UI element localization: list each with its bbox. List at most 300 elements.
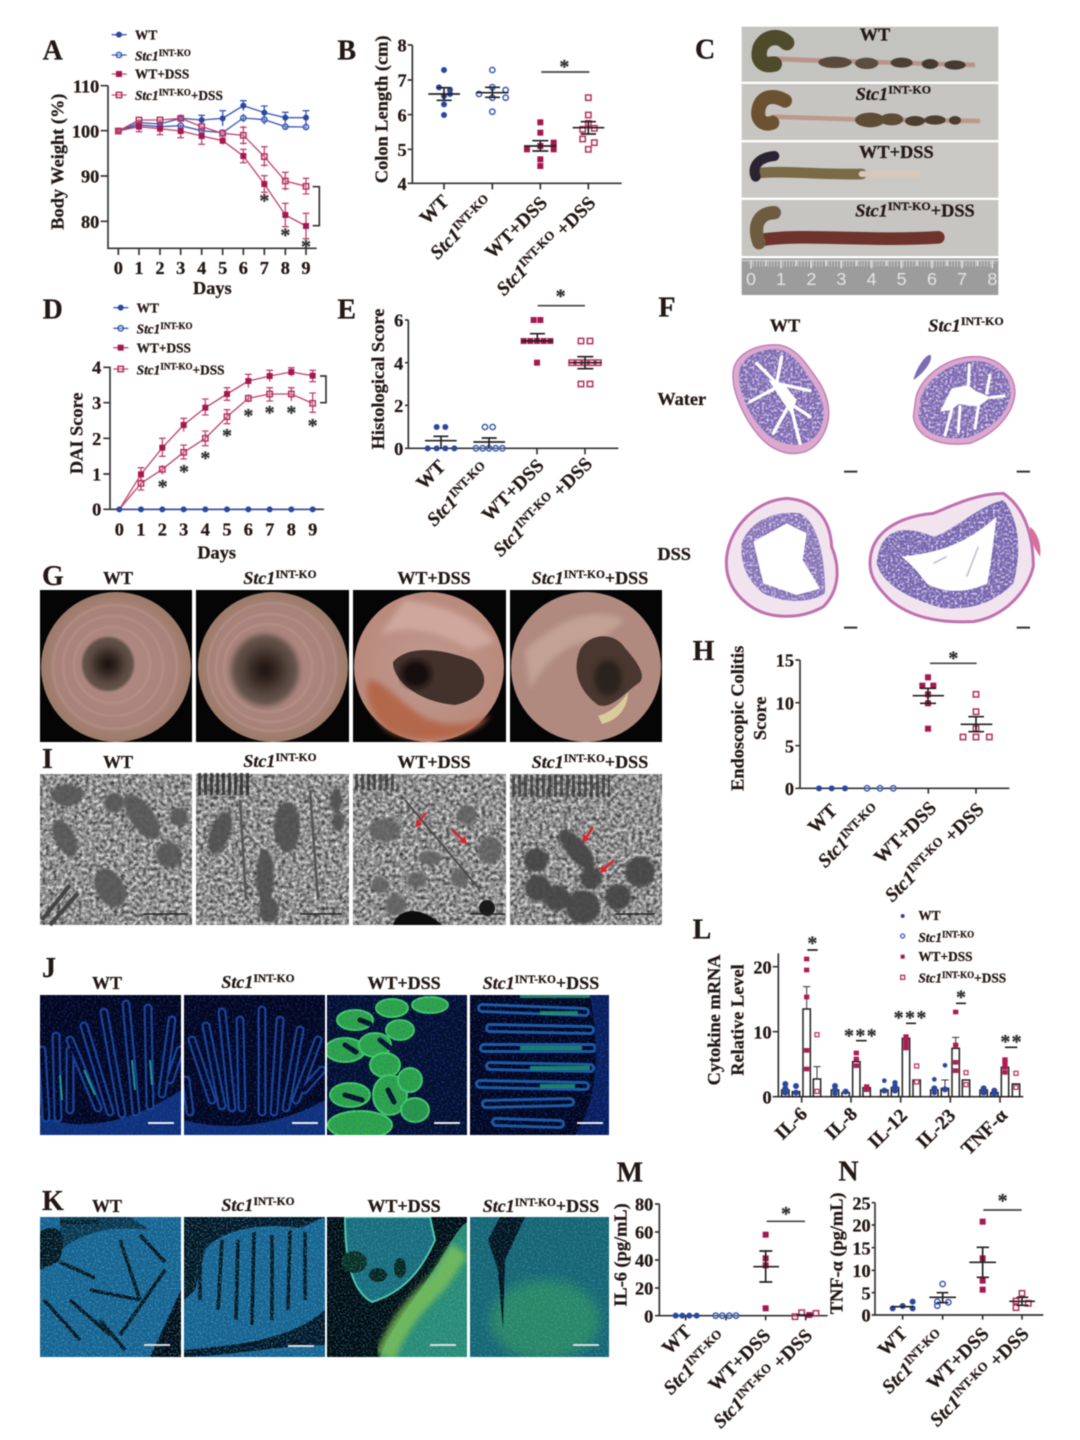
panel J headers: WT+DSS	[367, 973, 441, 993]
legend L: WT	[918, 908, 941, 923]
x labels E: WT	[413, 456, 450, 494]
panel E: histological score scatter	[337, 285, 618, 561]
legend L: Stc1	[918, 971, 942, 986]
y labels H: 15	[776, 651, 794, 671]
panel letter C: C	[695, 34, 715, 65]
y title L: Cytokine mRNA	[704, 954, 724, 1085]
legend D	[113, 300, 225, 377]
y labels D: 3	[92, 393, 101, 413]
electron micrograph Stc1 INT-KO	[196, 774, 349, 925]
x labels B: +DSS	[549, 193, 600, 244]
x labels D: 3	[179, 520, 188, 540]
x labels N: WT	[874, 1323, 912, 1361]
y labels N: 15	[852, 1238, 871, 1258]
y labels M: 60	[635, 1223, 653, 1243]
panel I headers: INT-KO	[275, 752, 317, 764]
y labels B	[397, 36, 407, 194]
x labels M: WT	[658, 1321, 696, 1359]
significance L: *	[956, 987, 966, 1009]
panel letter M: M	[617, 1158, 643, 1189]
y title E: Histological Score	[368, 309, 388, 449]
y labels D	[92, 358, 101, 520]
panel H: endoscopic colitis score scatter	[693, 636, 1009, 906]
panel I headers: WT+DSS	[397, 752, 471, 772]
y labels N: 5	[861, 1283, 871, 1303]
legend D: INT-KO	[160, 362, 193, 372]
panel I headers: WT	[103, 752, 133, 772]
y title L	[704, 954, 747, 1085]
x labels E: Stc1	[489, 522, 529, 561]
x labels L	[771, 1103, 1012, 1160]
y axis labels A: 110	[73, 77, 99, 97]
panel K headers: WT+DSS	[367, 1196, 441, 1216]
legend L: WT+DSS	[918, 949, 973, 964]
x labels E: Stc1	[423, 492, 462, 531]
x labels B	[416, 191, 600, 300]
endoscopy Stc1 INT-KO+DSS	[510, 590, 662, 742]
panel letter I: I	[42, 744, 53, 775]
series Stc1 INT-KO	[116, 114, 309, 135]
axes H	[795, 660, 1009, 794]
immunofluorescence K WT+DSS	[327, 1217, 467, 1357]
y labels N: 25	[852, 1193, 871, 1213]
ruler: 4	[867, 269, 877, 289]
x labels D: 1	[136, 520, 146, 540]
x axis labels A: 5	[218, 258, 227, 278]
significance bracket and stars A	[259, 187, 319, 258]
x labels E: +DSS	[546, 454, 597, 505]
photo row Stc1 INT-KO	[742, 82, 998, 140]
x axis labels A	[114, 258, 311, 278]
ruler: 6	[927, 269, 937, 289]
panel K headers: WT	[92, 1196, 122, 1216]
panel L: cytokine mRNA bar chart	[693, 908, 1023, 1160]
significance bracket and stars D: *	[179, 461, 189, 483]
x labels E	[413, 453, 597, 561]
x labels D	[115, 520, 317, 540]
legend D: +DSS	[192, 362, 225, 377]
y labels D: 1	[92, 465, 101, 485]
significance H: *	[948, 648, 958, 670]
section WT water	[733, 345, 829, 454]
x labels N	[874, 1323, 1034, 1431]
y axis labels A: 100	[72, 121, 99, 141]
legend A: WT	[135, 27, 157, 42]
panel K headers: INT-KO	[253, 1196, 295, 1208]
y title B: Colon Length (cm)	[371, 36, 392, 183]
x axis labels A: 0	[114, 258, 123, 278]
y labels H	[776, 651, 794, 799]
significance H	[930, 648, 977, 670]
data points L	[782, 957, 1018, 1097]
legend A: Stc1	[135, 88, 159, 103]
electron micrograph WT	[40, 774, 192, 925]
significance M	[767, 1203, 805, 1225]
x labels E: INT-KO	[513, 489, 555, 531]
x labels L: TNF-α	[957, 1105, 1012, 1160]
x labels N: INT-KO	[949, 1359, 991, 1401]
x labels H	[804, 798, 989, 906]
photo row Stc1 INT-KO: Stc1	[856, 84, 888, 104]
panel J headers: WT	[92, 973, 122, 993]
x labels L: IL-6	[771, 1103, 812, 1144]
y labels M: 80	[635, 1195, 653, 1215]
y labels H: 5	[785, 736, 794, 756]
photo row WT	[742, 25, 998, 82]
photo row WT+DSS	[742, 142, 998, 198]
series WT and Stc1 INT-KO baseline	[116, 506, 316, 512]
y axis labels A	[72, 77, 99, 232]
axes D	[103, 367, 324, 509]
x axis labels A: 2	[155, 258, 165, 278]
x labels D: 4	[201, 520, 210, 540]
x labels H: INT-KO	[837, 800, 879, 842]
x labels M: +DSS	[766, 1325, 817, 1376]
x labels B: INT-KO	[450, 191, 492, 233]
data points H	[816, 674, 992, 791]
immunofluorescence K Stc1 INT-KO	[184, 1217, 325, 1357]
y title M: IL-6 (pg/mL)	[611, 1203, 632, 1307]
panel I headers: Stc1	[243, 751, 275, 771]
y labels L: 20	[753, 957, 772, 977]
section WT DSS	[726, 498, 837, 616]
endoscopy WT	[40, 590, 192, 742]
y labels E: 4	[394, 353, 403, 373]
x labels M: INT-KO	[733, 1360, 775, 1402]
y labels D: 2	[92, 429, 101, 449]
x labels H: Stc1	[881, 867, 920, 906]
data points E	[425, 317, 602, 451]
y axis title A: Body Weight (%)	[47, 94, 68, 230]
legend D: WT	[137, 300, 159, 315]
panel G headers: WT+DSS	[397, 568, 471, 588]
y labels B: 4	[397, 174, 407, 194]
ruler: 3	[836, 269, 846, 289]
significance N	[983, 1190, 1022, 1212]
y labels H: 10	[776, 693, 794, 713]
ruler: 5	[897, 269, 907, 289]
legend D: INT-KO	[160, 321, 193, 331]
significance L: *	[807, 933, 817, 955]
x labels B: Stc1	[493, 261, 532, 300]
legend A: Stc1	[135, 49, 159, 64]
x labels M: Stc1	[709, 1394, 749, 1433]
x labels L: IL-23	[913, 1105, 960, 1153]
x axis labels A: 7	[260, 258, 269, 278]
red arrows Stc1 INT-KO+DSS	[583, 827, 614, 873]
panel letter J: J	[42, 953, 56, 984]
immunofluorescence J WT+DSS	[325, 995, 467, 1139]
panel F: H&E histology sections	[657, 293, 1040, 628]
y title L: Relative Level	[727, 964, 747, 1076]
photo row Stc1 INT-KO+DSS: INT-KO	[888, 199, 931, 213]
data points N	[890, 1219, 1035, 1311]
x labels E: WT+DSS	[478, 455, 549, 526]
y labels E: 2	[394, 396, 403, 416]
x labels M: INT-KO	[683, 1327, 725, 1369]
axes M	[655, 1204, 828, 1320]
legend A: WT+DSS	[135, 67, 189, 82]
series Stc1 INT-KO+DSS	[116, 116, 309, 194]
column label Stc1 INT-KO: INT-KO	[961, 314, 1004, 328]
panel letter E: E	[337, 294, 356, 325]
x labels B: Stc1	[426, 225, 466, 264]
y labels N: 20	[852, 1216, 871, 1236]
significance M: *	[781, 1203, 791, 1225]
panel I headers: +DSS	[605, 752, 648, 772]
error bars L	[803, 987, 959, 1088]
x labels B: WT+DSS	[481, 193, 552, 263]
panel G headers: INT-KO	[275, 569, 317, 581]
y title H	[727, 646, 770, 791]
y labels M: 0	[644, 1306, 653, 1326]
significance bracket and stars D: *	[158, 476, 168, 498]
significance bracket and stars D: *	[200, 448, 210, 470]
panel C: gross colon photographs	[695, 25, 998, 295]
y labels N: 0	[861, 1306, 871, 1326]
x labels H: Stc1	[814, 833, 853, 872]
y labels B: 7	[397, 71, 407, 91]
panel B: colon length scatter	[337, 35, 622, 300]
panel I headers: INT-KO	[564, 753, 605, 765]
x labels D: 6	[244, 520, 253, 540]
panel G headers	[103, 568, 648, 588]
legend L	[901, 908, 1006, 986]
panel G headers: INT-KO	[564, 569, 605, 581]
x labels L: IL-8	[821, 1103, 862, 1144]
significance bracket and stars A: *	[280, 224, 290, 246]
y labels M	[635, 1195, 653, 1326]
panel letter H: H	[693, 636, 715, 667]
x axis title A: Days	[193, 278, 232, 298]
panel letter L: L	[693, 914, 711, 945]
ruler	[742, 258, 998, 295]
panel J headers: INT-KO	[515, 974, 556, 986]
series Stc1 INT-KO+DSS D	[119, 388, 316, 509]
x labels M: WT+DSS	[705, 1325, 775, 1396]
x axis labels A: 1	[134, 258, 144, 278]
x axis labels A: 9	[301, 258, 311, 278]
significance L: ***	[844, 1025, 878, 1047]
significance bracket and stars D	[158, 376, 326, 498]
y title D: DAI Score	[67, 393, 87, 474]
y labels B: 6	[397, 105, 407, 125]
axes N	[872, 1203, 1043, 1320]
panel K headers	[92, 1195, 599, 1216]
red arrows WT+DSS	[415, 813, 467, 844]
panel J headers: INT-KO	[253, 973, 295, 985]
panel K headers: Stc1	[221, 1195, 253, 1215]
legend L: INT-KO	[942, 970, 974, 980]
y labels E	[394, 311, 403, 459]
panel I headers: Stc1	[532, 752, 564, 772]
significance bracket and stars D: *	[308, 415, 318, 437]
y labels L: 10	[753, 1022, 772, 1042]
significance L: **	[1000, 1031, 1023, 1053]
y labels L: 0	[762, 1087, 772, 1107]
x labels H: INT-KO	[904, 834, 946, 876]
series WT+DSS	[115, 122, 309, 239]
panel D: DAI score line chart	[43, 294, 326, 562]
ruler: 0	[746, 269, 756, 289]
axes A	[101, 86, 317, 255]
significance bracket and stars D: *	[222, 425, 232, 447]
photo row Stc1 INT-KO+DSS: Stc1	[855, 201, 888, 221]
x labels L: IL-12	[864, 1105, 912, 1153]
column label Stc1 INT-KO: Stc1	[928, 316, 961, 336]
legend D: WT+DSS	[137, 340, 191, 355]
y labels M: 40	[635, 1251, 653, 1271]
x labels D: 8	[287, 520, 296, 540]
panel J headers: +DSS	[556, 973, 599, 993]
legend D: Stc1	[137, 362, 160, 377]
legend L: INT-KO	[942, 929, 974, 939]
significance bracket and stars A: *	[259, 190, 269, 212]
significance N: *	[998, 1190, 1008, 1212]
panel G headers: +DSS	[605, 568, 648, 588]
y labels M: 20	[635, 1279, 653, 1299]
panel A: body weight line chart	[43, 27, 319, 298]
significance B	[541, 56, 589, 78]
y labels E: 0	[394, 439, 403, 459]
x labels H: WT+DSS	[870, 798, 941, 868]
significance bracket and stars A: *	[301, 236, 311, 258]
x labels B: WT	[416, 191, 454, 229]
photo row WT: WT	[860, 25, 890, 45]
significance B: *	[559, 56, 569, 78]
ruler: 8	[987, 269, 997, 289]
data points B	[428, 67, 604, 169]
y labels N	[852, 1193, 871, 1326]
ruler: 2	[806, 269, 816, 289]
x labels H: +DSS	[937, 799, 989, 850]
significance bracket and stars D: *	[286, 402, 296, 424]
x labels D: 5	[222, 520, 232, 540]
significance L	[807, 933, 1023, 1053]
legend L: Stc1	[918, 930, 942, 945]
ruler: 1	[776, 269, 786, 289]
bars L	[782, 1009, 1020, 1097]
axes E	[405, 320, 618, 454]
x labels E: INT-KO	[446, 458, 488, 500]
photo row Stc1 INT-KO: INT-KO	[888, 82, 931, 96]
column label WT: WT	[770, 316, 800, 336]
x axis labels A: 6	[239, 258, 248, 278]
x labels D: 7	[265, 520, 274, 540]
x axis labels A: 4	[197, 258, 206, 278]
scale bars F	[844, 472, 1030, 628]
panel K headers: INT-KO	[515, 1197, 556, 1209]
electron micrograph Stc1 INT-KO+DSS	[510, 774, 662, 925]
panel letter F: F	[658, 293, 675, 324]
panel K headers: Stc1	[483, 1196, 515, 1216]
legend L: +DSS	[974, 971, 1006, 986]
panel letter B: B	[337, 35, 356, 66]
x labels N: WT+DSS	[923, 1324, 994, 1394]
row label Water: Water	[657, 389, 706, 409]
significance bracket and stars D: *	[243, 405, 253, 427]
immunofluorescence J WT	[40, 995, 181, 1135]
row label DSS: DSS	[657, 544, 691, 564]
legend D: Stc1	[137, 322, 160, 337]
significance bracket and stars D: *	[265, 402, 275, 424]
panel J headers: Stc1	[483, 973, 515, 993]
section Stc1 INT-KO DSS	[870, 493, 1040, 622]
x labels N: INT-KO	[901, 1326, 943, 1368]
y labels D: 4	[92, 358, 101, 378]
panel G headers: WT	[103, 568, 133, 588]
photo row WT+DSS: WT+DSS	[859, 142, 934, 162]
panel letter G: G	[42, 561, 64, 592]
x labels M	[658, 1321, 817, 1433]
x labels N: Stc1	[878, 1359, 917, 1398]
y title N: TNF-α (pg/mL)	[827, 1192, 848, 1314]
panel I headers	[103, 751, 648, 772]
electron micrograph WT+DSS	[353, 774, 506, 925]
legend A	[112, 27, 223, 103]
panel letter N: N	[838, 1157, 859, 1188]
y labels H: 0	[785, 779, 794, 799]
x title D: Days	[197, 542, 236, 562]
significance E: *	[556, 285, 566, 307]
significance E	[538, 285, 585, 307]
endoscopy Stc1 INT-KO	[196, 590, 349, 742]
y labels D: 0	[92, 500, 101, 520]
photo row Stc1 INT-KO+DSS: +DSS	[931, 201, 975, 221]
legend A: +DSS	[191, 88, 223, 103]
panel K headers: +DSS	[556, 1196, 599, 1216]
legend A: INT-KO	[159, 87, 191, 97]
x labels N: +DSS	[982, 1324, 1034, 1375]
y labels E: 6	[394, 311, 403, 331]
y labels L	[753, 957, 772, 1107]
section Stc1 INT-KO water	[913, 355, 1015, 444]
axes B	[408, 45, 622, 189]
panel letter D: D	[43, 294, 63, 325]
x labels B: INT-KO	[516, 228, 558, 270]
panel J headers: Stc1	[221, 972, 253, 992]
y axis labels A: 90	[81, 167, 99, 187]
axes L	[773, 953, 1023, 1103]
immunofluorescence J Stc1 INT-KO	[184, 995, 325, 1135]
y axis labels A: 80	[81, 212, 99, 232]
panel G headers: Stc1	[243, 568, 275, 588]
photo row Stc1 INT-KO+DSS	[742, 199, 998, 256]
panels M and N: IL-6 and TNF-alpha ELISA scatter	[611, 1157, 1043, 1433]
x labels M: Stc1	[660, 1360, 699, 1399]
x labels D: 9	[308, 520, 317, 540]
immunofluorescence J Stc1 INT-KO+DSS	[470, 995, 609, 1135]
x axis labels A: 3	[176, 258, 185, 278]
series WT	[115, 101, 309, 134]
y labels B: 5	[397, 140, 407, 160]
ruler: 7	[957, 269, 967, 289]
panel G headers: Stc1	[532, 568, 564, 588]
x labels H: WT	[804, 800, 842, 838]
x axis labels A: 8	[281, 258, 290, 278]
data points M	[673, 1232, 819, 1319]
panel letter K: K	[42, 1186, 64, 1217]
x labels N: Stc1	[926, 1392, 965, 1431]
x labels D: 2	[158, 520, 167, 540]
panel J headers	[92, 972, 599, 993]
immunofluorescence K WT	[40, 1217, 181, 1357]
y title H: Score	[750, 697, 770, 740]
endoscopy WT+DSS	[353, 590, 506, 742]
y labels B: 8	[397, 36, 407, 56]
series WT+DSS D	[119, 368, 316, 509]
immunofluorescence K Stc1 INT-KO+DSS	[470, 1217, 609, 1360]
